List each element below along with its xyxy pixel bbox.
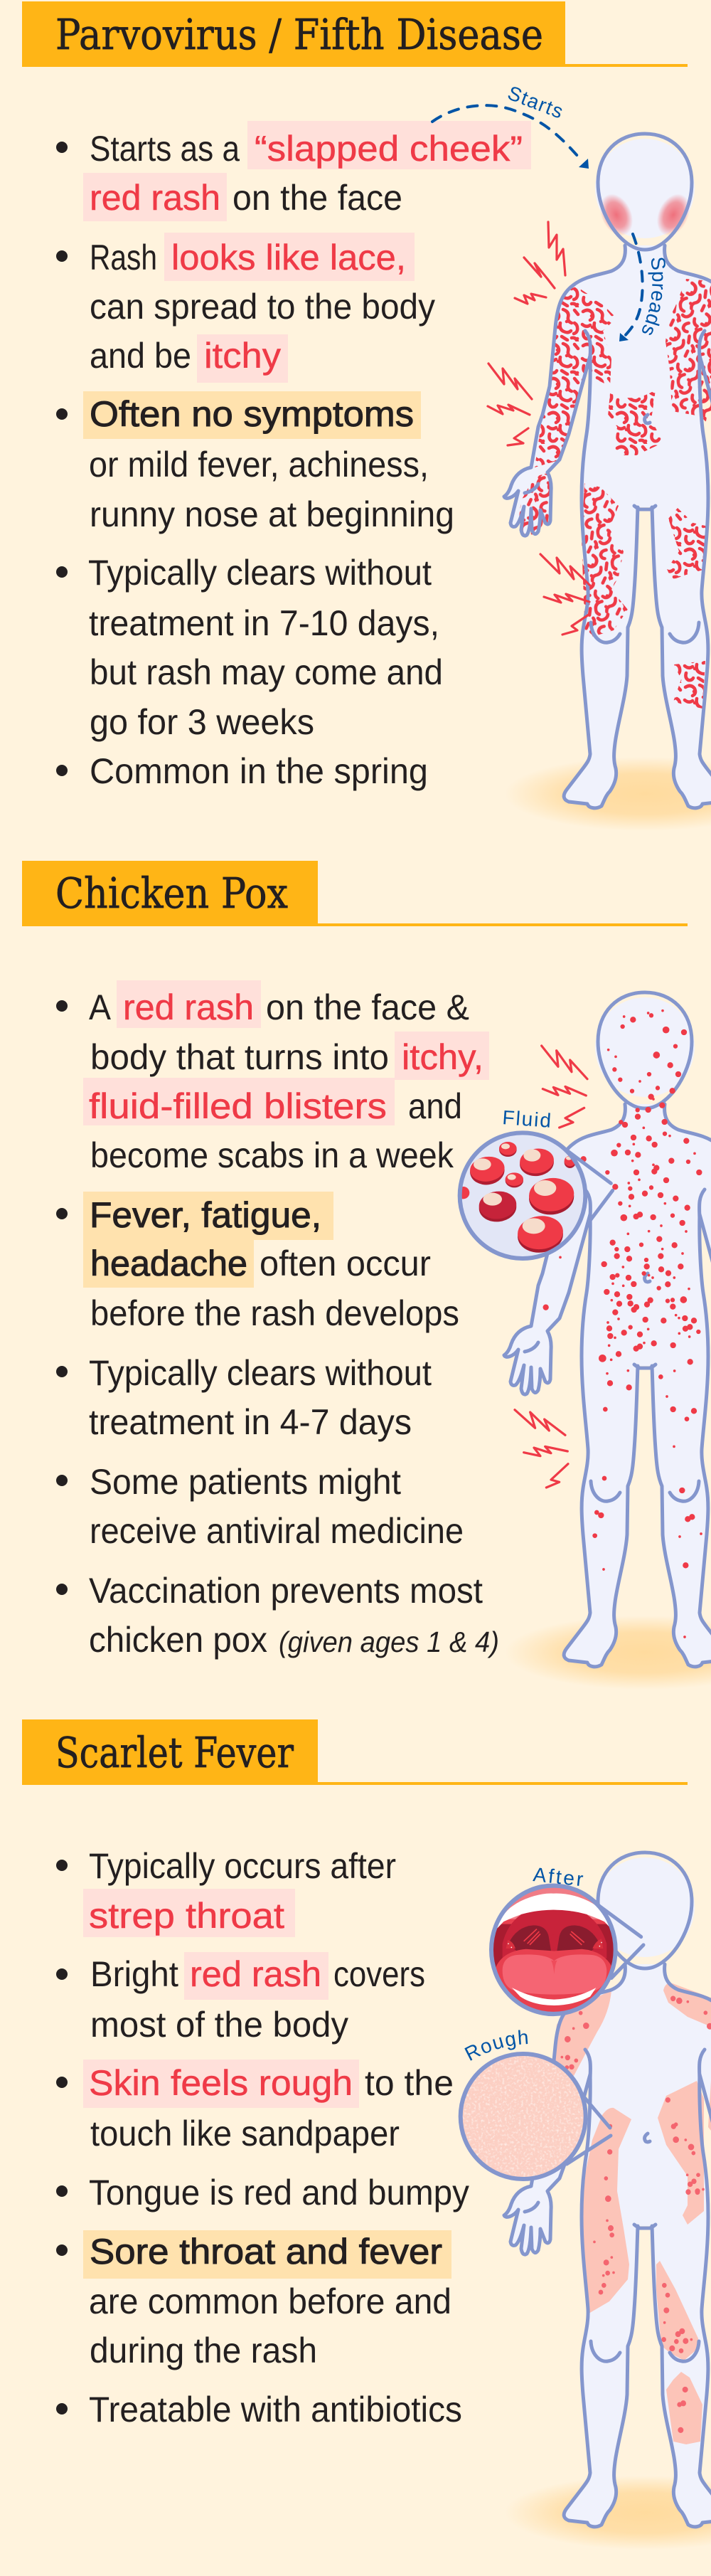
bullet: often no symptoms: runny nose at beginning bbox=[90, 494, 454, 534]
bullet: slapped cheek rash: Starts as a bbox=[90, 129, 240, 169]
bullet: looks like lace: and be bbox=[90, 336, 191, 376]
bullet: red rash and blisters: A bbox=[89, 987, 112, 1027]
bullet: slapped cheek rash: “slapped cheek” bbox=[255, 129, 523, 169]
bullet: red rash and blisters: body that turns into bbox=[90, 1037, 389, 1077]
figure: body with blisters bbox=[504, 992, 711, 1667]
floor shadow bbox=[505, 757, 711, 831]
bullet: antiviral medicine: Some patients might bbox=[90, 1462, 401, 1502]
bullet: clears in 4-7 days bbox=[56, 1353, 432, 1442]
bullet: vaccination: Vaccination prevents most bbox=[89, 1571, 483, 1611]
bullet: vaccination bbox=[56, 1571, 499, 1660]
bullet: often no symptoms bbox=[56, 391, 454, 534]
pink rash patches bbox=[552, 1983, 711, 2444]
red spots bbox=[546, 1011, 699, 1349]
bullet: looks like lace: itchy bbox=[204, 336, 281, 376]
bullet: clears without treatment: Typically clears without bbox=[88, 553, 432, 593]
magnifier: rough skin bbox=[460, 2054, 611, 2179]
bullet: red rash and blisters: become scabs in a week bbox=[90, 1135, 454, 1175]
bullet: antiviral medicine: receive antiviral medicine bbox=[90, 1511, 464, 1551]
bullet: fever fatigue headache: Fever, fatigue, bbox=[90, 1195, 321, 1235]
figure: body with lacy rash bbox=[504, 134, 711, 808]
bullet: clears in 4-7 days: Typically clears without bbox=[89, 1353, 432, 1393]
bullet: red rash covers body: covers bbox=[333, 1954, 425, 1994]
heading: parvovirus: Parvovirus / Fifth Disease bbox=[55, 10, 543, 59]
bullet: fever fatigue headache bbox=[56, 1192, 459, 1333]
bullet: skin feels rough: to the bbox=[365, 2063, 454, 2103]
bullet: fever fatigue headache: headache bbox=[90, 1244, 247, 1283]
bullet: sore throat and fever: during the rash bbox=[90, 2331, 317, 2370]
bullet: clears without treatment: but rash may come and bbox=[90, 652, 443, 692]
bullet: skin feels rough bbox=[56, 2060, 454, 2153]
bullet: clears without treatment: go for 3 weeks bbox=[90, 702, 314, 742]
bullet: red rash covers body bbox=[56, 1952, 425, 2045]
bullet: slapped cheek rash: on the face bbox=[232, 178, 402, 218]
magnifier: throat bbox=[491, 1885, 643, 2014]
blisters bbox=[457, 1142, 576, 1255]
heading: chicken pox: Chicken Pox bbox=[55, 869, 288, 918]
lace rash patches bbox=[515, 279, 711, 709]
lower teeth bbox=[512, 1988, 596, 2005]
bullet: red rash and blisters: fluid-filled blisters bbox=[89, 1086, 387, 1126]
panel: parvovirus bbox=[22, 1, 711, 828]
itch marks bbox=[488, 222, 590, 635]
bullet: slapped cheek rash bbox=[56, 121, 531, 221]
bullet: common in spring: Common in the spring bbox=[90, 751, 428, 791]
bullet: clears without treatment bbox=[56, 553, 443, 742]
bullet: fever fatigue headache: before the rash develops bbox=[90, 1293, 459, 1333]
bullet: sore throat and fever bbox=[56, 2230, 451, 2370]
bullet: red rash covers body: most of the body bbox=[90, 2005, 348, 2045]
bullet: red rash and blisters: red rash bbox=[123, 987, 254, 1027]
label: rough: Rough bbox=[464, 2030, 528, 2061]
bullet: often no symptoms: or mild fever, achiness, bbox=[89, 445, 429, 484]
arrow: starts on cheek bbox=[432, 82, 589, 169]
heading: scarlet fever bbox=[22, 1719, 688, 1785]
panel: chicken pox bbox=[22, 861, 711, 1690]
bullet: looks like lace: Rash bbox=[90, 238, 157, 277]
heading: parvovirus bbox=[22, 1, 688, 67]
bullet: strep throat: strep throat bbox=[89, 1896, 284, 1936]
floor shadow bbox=[505, 1616, 711, 1690]
arrow: spreads to body bbox=[619, 232, 665, 341]
bullet: strep throat bbox=[56, 1846, 396, 1937]
panel: scarlet fever bbox=[22, 1719, 711, 2547]
label: after: After bbox=[532, 1863, 585, 1890]
bullet: red rash and blisters: on the face & bbox=[266, 987, 469, 1027]
figure: body with scarlet patches bbox=[504, 1853, 711, 2527]
rash spots bbox=[562, 1998, 710, 2199]
bullet: clears in 4-7 days: treatment in 4-7 days bbox=[89, 1402, 412, 1442]
arrow: spreads to body: Spreads bbox=[642, 258, 665, 335]
bullet: slapped cheek rash: red rash bbox=[90, 178, 220, 218]
throat arches bbox=[508, 1925, 551, 1951]
bullet: red rash covers body: red rash bbox=[190, 1954, 321, 1994]
bullet: red rash covers body: Bright bbox=[90, 1954, 178, 1994]
bullet: antibiotics: Treatable with antibiotics bbox=[89, 2390, 462, 2429]
bullet: sore throat and fever: are common before and bbox=[89, 2281, 451, 2321]
bullet: tongue: Tongue is red and bumpy bbox=[89, 2173, 469, 2212]
bullet: skin feels rough: touch like sandpaper bbox=[90, 2114, 400, 2153]
label: fluid: Fluid bbox=[502, 1106, 553, 1132]
bullet: antiviral medicine bbox=[56, 1462, 464, 1551]
bullet: often no symptoms: Often no symptoms bbox=[90, 394, 414, 434]
bullet: vaccination: chicken pox bbox=[89, 1620, 267, 1660]
bullet: vaccination: (given ages 1 & 4) bbox=[279, 1626, 499, 1658]
bullet: clears without treatment: treatment in 7-10 days, bbox=[89, 603, 439, 643]
heading: chicken pox bbox=[22, 861, 688, 926]
bullet: sore throat and fever: Sore throat and fever bbox=[90, 2232, 442, 2272]
heading: scarlet fever: Scarlet Fever bbox=[55, 1728, 294, 1777]
floor shadow bbox=[505, 2476, 711, 2550]
bullet: looks like lace bbox=[56, 233, 435, 383]
arrow: starts on cheek: Starts bbox=[505, 82, 567, 123]
bullet: skin feels rough: Skin feels rough bbox=[89, 2063, 353, 2103]
tongue bbox=[496, 1949, 611, 1976]
bullet: red rash and blisters: itchy, bbox=[402, 1037, 483, 1077]
bullet: looks like lace: can spread to the body bbox=[90, 287, 435, 327]
magnifier: fluid blisters bbox=[457, 1133, 613, 1258]
bullet: red rash and blisters bbox=[56, 980, 489, 1175]
bullet: looks like lace: looks like lace, bbox=[171, 238, 406, 277]
upper teeth bbox=[497, 1894, 609, 1929]
bullet: red rash and blisters: and bbox=[408, 1086, 462, 1126]
itch marks bbox=[515, 1046, 587, 1488]
cheek rash bbox=[594, 189, 696, 241]
bullet: fever fatigue headache: often occur bbox=[260, 1244, 431, 1283]
bullet: strep throat: Typically occurs after bbox=[89, 1846, 396, 1886]
